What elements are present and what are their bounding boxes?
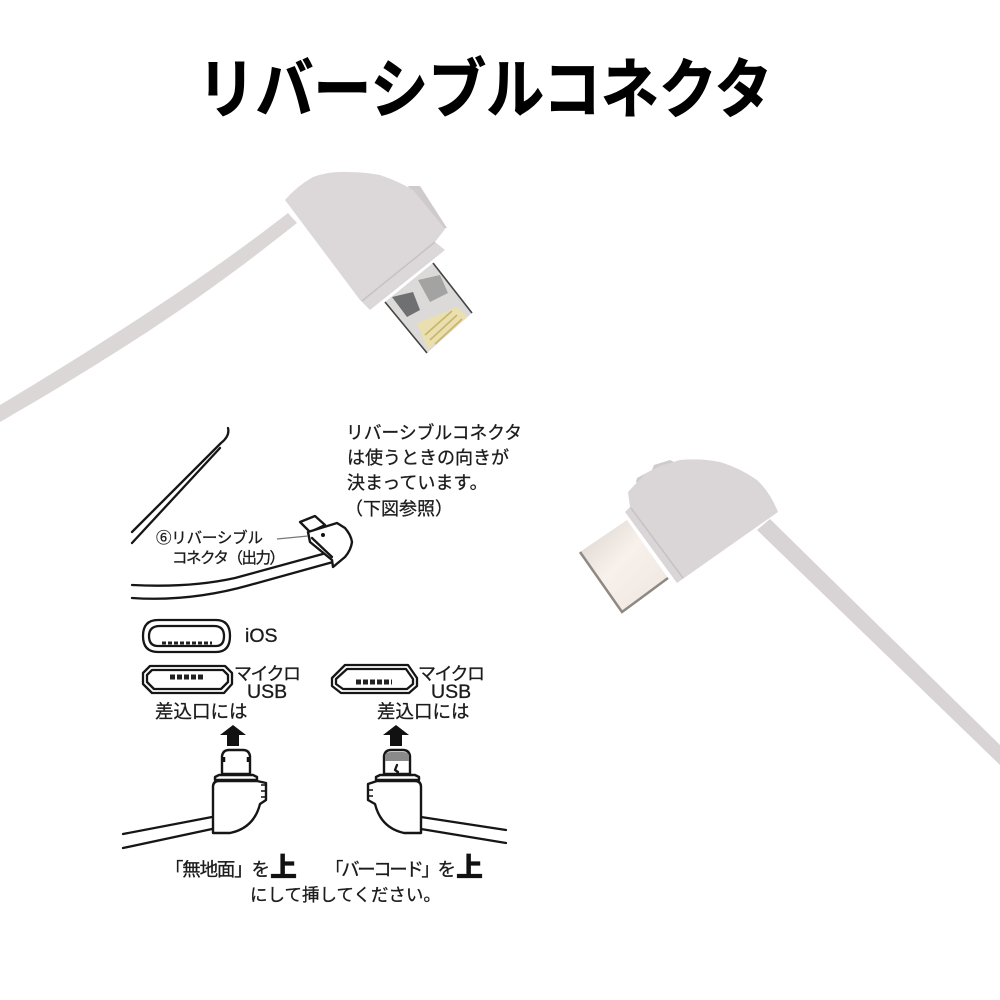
caption: right: 「バーコード」を (325, 859, 456, 880)
upper cable line drawing (132, 428, 228, 543)
connector bumps (408, 186, 447, 230)
photo: lightning connector and cable (0, 172, 472, 422)
lower cable line drawing (132, 552, 333, 599)
connector plug: opening edge (580, 552, 668, 612)
caption: left: 上 (270, 853, 297, 883)
title: リバーシブルコネクタ (198, 53, 772, 126)
connector bumps (636, 460, 680, 495)
connector body edge (631, 508, 683, 578)
port icon: iOS (143, 620, 230, 652)
label: iOS: iOS (245, 625, 278, 647)
label: insert right: 差込口には (377, 701, 470, 722)
arrow: left (220, 725, 246, 746)
caption: right (325, 853, 483, 883)
callout text: リバーシブルコネクタ (346, 422, 522, 443)
callout text: （下図参照） (345, 499, 453, 519)
callout text: 決まっています。 (347, 473, 488, 493)
label: micro USB right (418, 664, 485, 703)
caption: left (165, 853, 297, 883)
connector label: ⑥リバーシブル (156, 528, 263, 547)
connector body edge (362, 242, 435, 301)
label: micro USB left (234, 664, 301, 703)
callout text (345, 422, 522, 519)
label: insert left: 差込口には (155, 701, 248, 722)
cable: right (757, 519, 1000, 765)
connector body (625, 459, 778, 583)
plug drawing: left (123, 750, 266, 848)
caption: second line: にして挿してください。 (250, 885, 441, 905)
cable: left (0, 213, 297, 422)
connector label (156, 528, 285, 567)
illustration: connection instructions (123, 422, 522, 905)
port icon: micro USB right (332, 665, 417, 693)
connector body (285, 172, 445, 310)
port icon: micro USB left (143, 666, 232, 693)
label: micro USB left: USB (247, 681, 287, 703)
plug drawing: right (368, 750, 506, 843)
connector label: コネクタ（出力） (172, 549, 285, 567)
connector pins: lightning (385, 263, 472, 353)
connector line drawing (277, 516, 352, 567)
caption: left: 「無地面」を (165, 859, 270, 880)
label: micro USB left: マイクロ (234, 664, 301, 684)
photo: USB-C connector and cable (580, 459, 1000, 765)
connector plug: metal (580, 520, 668, 612)
label: micro USB right: マイクロ (418, 664, 485, 684)
caption: right: 上 (456, 853, 483, 883)
callout text: は使うときの向きが (347, 448, 509, 468)
label: micro USB right: USB (431, 681, 471, 703)
arrow: right (383, 725, 409, 746)
